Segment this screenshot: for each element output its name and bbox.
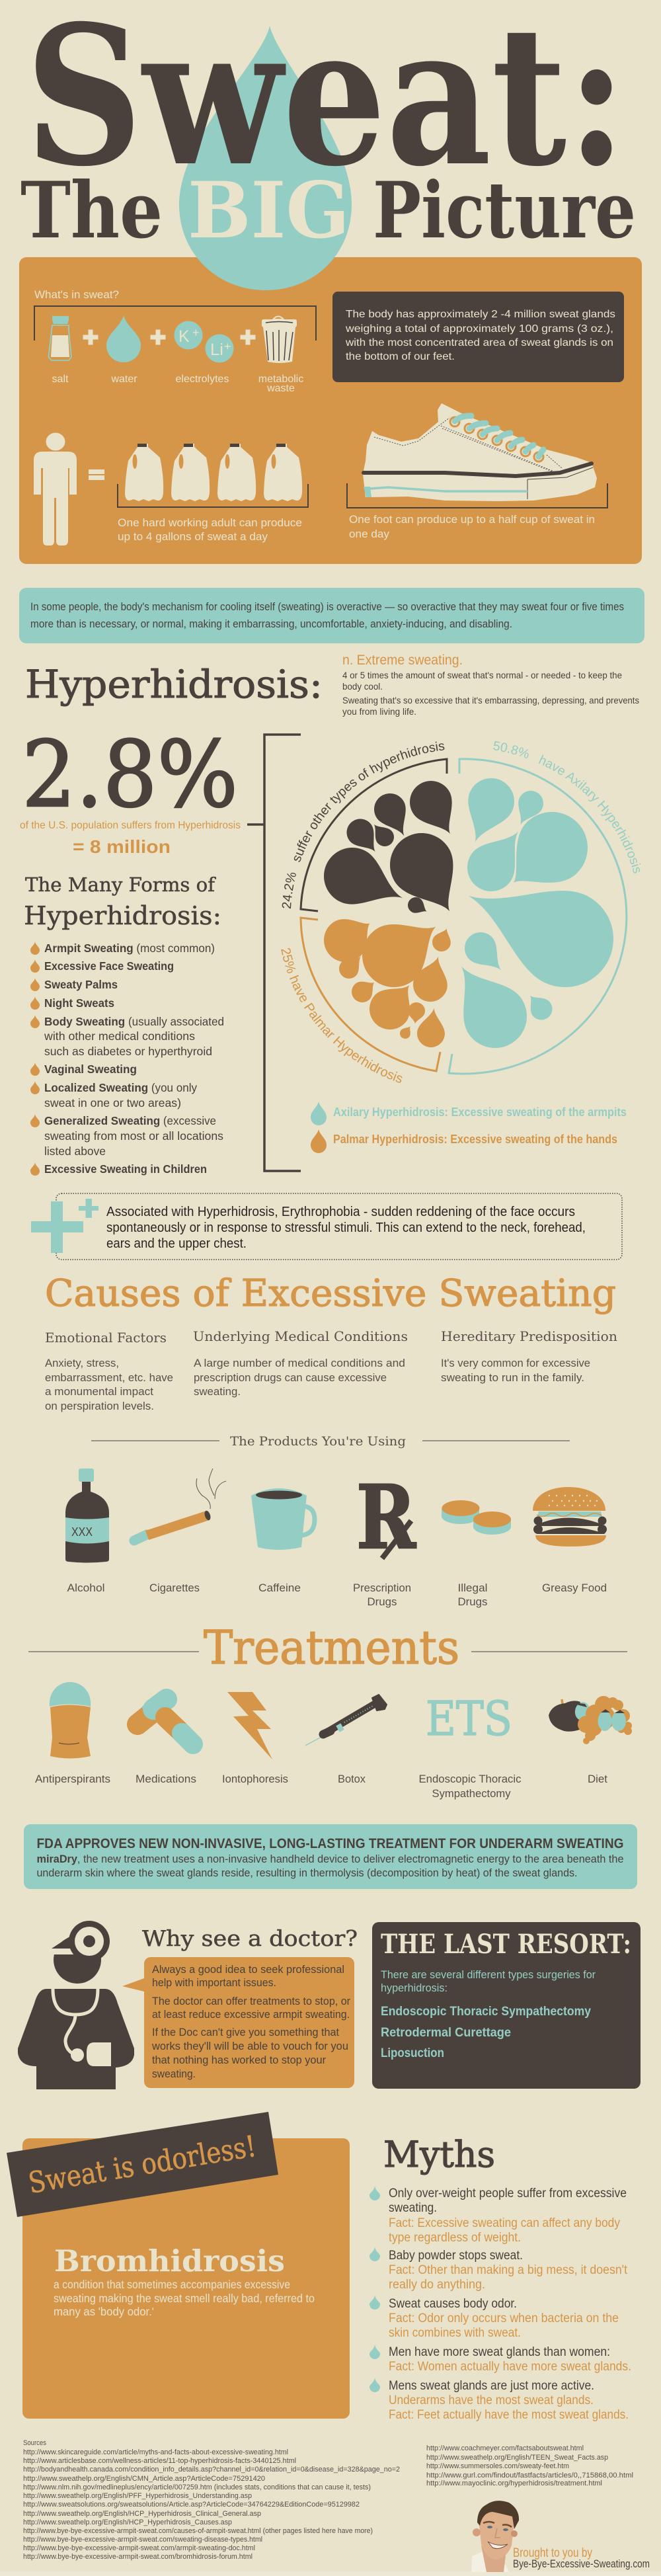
icon: medications xyxy=(137,1699,193,1744)
cause: emotional factors xyxy=(45,1330,173,1412)
product labels: Drugs xyxy=(457,1595,488,1608)
list: myths and facts: Baby powder stops sweat. xyxy=(389,2249,523,2263)
icon: alcohol: XXX xyxy=(71,1525,93,1539)
legend: Axilary Hyperhidrosis: Excessive sweating of the armpits xyxy=(333,1106,627,1119)
list: forms of hyperhidrosis: sweat in one or two areas) xyxy=(44,1096,181,1109)
statistic: 2.8%: 2.8% xyxy=(22,721,238,828)
callout: sweat glands: with the most concentrated area of sweat glands is on xyxy=(345,337,613,348)
list: myths and facts: skin combines with sweat. xyxy=(389,2326,521,2340)
bracket: shoe xyxy=(347,483,607,508)
list: myths and facts: type regardless of weight. xyxy=(389,2231,521,2245)
list: myths and facts: Fact: Women actually have more sweat glands. xyxy=(389,2360,631,2374)
ingredient labels: waste xyxy=(266,383,295,394)
text: gallons per day xyxy=(118,516,302,543)
ingredient labels: salt xyxy=(52,374,69,385)
list: forms of hyperhidrosis: with other medical conditions xyxy=(44,1029,195,1043)
icon: electrolytes: + xyxy=(192,326,200,339)
icon: plus xyxy=(241,329,255,345)
subheading: products: The Products You're Using xyxy=(230,1434,406,1449)
panel: the last resort: hyperhidrosis: xyxy=(381,1982,447,1994)
callout: sweat glands: weighing a total of approximately 100 grams (3 oz.), xyxy=(345,323,613,335)
panel: what's in sweat xyxy=(19,257,642,564)
heading: hyperhidrosis: Hyperhidrosis: xyxy=(25,662,323,707)
sources: left column xyxy=(23,2439,400,2561)
legend xyxy=(311,1102,627,1153)
product labels: Cigarettes xyxy=(149,1582,200,1594)
icon: water xyxy=(106,315,141,362)
sources: right column: http://www.summersoles.com/sweaty-feet.htm xyxy=(426,2462,569,2470)
icon: large title water drop xyxy=(179,26,352,290)
list: forms of hyperhidrosis: Night Sweats xyxy=(44,996,114,1010)
bracket: ingredients xyxy=(34,306,316,341)
text: gallons per day: up to 4 gallons of sweat a day xyxy=(118,530,268,543)
chart label: palmar: 25% have Palmar Hyperhidrosis xyxy=(281,948,403,1083)
panel: FDA approval: miraDry, the new treatment uses a non-invasive handheld device to deliver electromagnetic energy to the area beneath the xyxy=(37,1853,624,1865)
cause: medical conditions: sweating. xyxy=(194,1386,241,1398)
heading: many forms xyxy=(24,873,221,930)
sources: left column: http://www.sweathelp.org/English/PFF_Hyperhidrosis_Understanding.asp xyxy=(23,2492,252,2500)
chart: palmar drops xyxy=(315,901,455,1049)
ingredient labels: electrolytes xyxy=(176,374,229,385)
panel: overactive intro: more than is necessary, or normal, making it embarrassing, uncomfortable, anxiety-inducing, and disabling. xyxy=(30,618,512,630)
treatment labels xyxy=(35,1773,607,1800)
callout: doctor speech bubble: The doctor can offer treatments to stop, or xyxy=(152,1995,350,2007)
treatment labels: Antiperspirants xyxy=(35,1773,110,1785)
treatment labels: Iontophoresis xyxy=(222,1773,288,1785)
list: myths and facts: Sweat causes body odor. xyxy=(389,2297,517,2311)
cause: medical conditions xyxy=(193,1328,408,1398)
cause: hereditary xyxy=(441,1328,617,1384)
sources: left column: http://www.bye-bye-excessive-armpit-sweat.com/armpit-sweating-doc.html xyxy=(23,2544,255,2552)
list: myths and facts: really do anything. xyxy=(389,2278,485,2292)
text: half cup xyxy=(349,513,595,540)
icon: person xyxy=(34,432,77,545)
definition: 4 or 5 times the amount of sweat that's normal - or needed - to keep the xyxy=(342,670,622,680)
panel: bromhidrosis: many as 'body odor.' xyxy=(54,2305,154,2318)
heading: many forms: The Many Forms of xyxy=(25,873,216,896)
product labels: Alcohol xyxy=(67,1582,104,1594)
icon: caffeine xyxy=(251,1488,315,1550)
text: half cup: One foot can produce up to a half cup of sweat in xyxy=(349,513,595,526)
cause: medical conditions: A large number of medical conditions and xyxy=(194,1357,405,1369)
callout: doctor speech bubble: If the Doc can't give you something that xyxy=(152,2026,339,2038)
icon: antiperspirant xyxy=(50,1682,91,1759)
icon: cigarette xyxy=(134,1469,226,1541)
callout: erythrophobia: Associated with Hyperhidrosis, Erythrophobia - sudden reddening of the face occurs xyxy=(106,1205,575,1219)
product labels xyxy=(67,1582,607,1608)
product labels: Greasy Food xyxy=(542,1582,607,1594)
icon: syringe xyxy=(305,1695,387,1746)
definition xyxy=(342,653,639,717)
panel: bromhidrosis: a condition that sometimes accompanies excessive xyxy=(54,2278,290,2291)
heading: causes: Causes of Excessive Sweating xyxy=(45,1272,616,1315)
callout: doctor speech bubble: at least reduce excessive armpit sweating. xyxy=(152,2008,350,2021)
chart: other types drops xyxy=(315,773,477,928)
cause: emotional factors: a monumental impact xyxy=(45,1386,153,1398)
callout: erythrophobia: ears and the upper chest. xyxy=(106,1236,247,1251)
icon: electrolytes xyxy=(175,321,234,362)
treatment labels: Sympathectomy xyxy=(432,1787,511,1800)
panel: bromhidrosis xyxy=(22,2138,350,2419)
icon: plus xyxy=(83,329,98,345)
callout: erythrophobia: spontaneously or in response to stressful stimuli. This can extend to the neck, forehead, xyxy=(106,1221,586,1235)
list: myths and facts xyxy=(369,2186,631,2422)
sources: left column: Sources xyxy=(23,2439,46,2447)
bracket: statistics xyxy=(247,735,301,1171)
cause: emotional factors: Emotional Factors xyxy=(45,1330,167,1346)
chart: axillary drops xyxy=(435,772,629,1061)
heading: myths: Myths xyxy=(383,2134,495,2175)
icon: electrolytes: K xyxy=(178,327,190,346)
cause: medical conditions: prescription drugs can cause excessive xyxy=(194,1372,387,1384)
sources: right column: http://www.gurl.com/findout/fastfacts/articles/0,,715868,00.html xyxy=(426,2472,633,2479)
sources: left column: http://www.sweatsolutions.org/sweatsolutions/Article.asp?ArticleCode=34764229&EditionCode=95129982 xyxy=(23,2501,360,2509)
cause: emotional factors: Anxiety, stress, xyxy=(45,1357,119,1369)
list: myths and facts: Fact: Excessive sweating can affect any body xyxy=(389,2216,620,2230)
panel: the last resort: Liposuction xyxy=(381,2046,444,2060)
list: myths and facts: Fact: Odor only occurs when bacteria on the xyxy=(389,2312,619,2325)
callout: doctor speech bubble: help with important issues. xyxy=(152,1976,276,1989)
icon: electrolytes: + xyxy=(224,340,231,353)
list: myths and facts: Men have more sweat glands than women: xyxy=(389,2345,610,2359)
panel: FDA approval: underarm skin where the sweat glands reside, resulting in thermolysis (decomposition by heat) of the sweat glands. xyxy=(37,1867,578,1879)
callout: sweat glands: the bottom of our feet. xyxy=(346,351,455,362)
list: forms of hyperhidrosis: listed above xyxy=(44,1145,106,1158)
panel: the last resort: Endoscopic Thoracic Sympathectomy xyxy=(381,2005,591,2019)
ingredient labels: water xyxy=(110,374,137,385)
statistic: 2.8%: of the U.S. population suffers from Hyperhidrosis xyxy=(20,820,241,831)
credit xyxy=(513,2546,650,2570)
icon: diet xyxy=(549,1696,632,1744)
icon: ETS: ETS xyxy=(426,1691,512,1746)
chart: arcs xyxy=(301,759,627,1074)
list: forms of hyperhidrosis: Excessive Sweating in Children xyxy=(44,1162,207,1176)
callout: sweat glands: The body has approximately 2 -4 million sweat glands xyxy=(346,309,615,320)
treatment labels: Endoscopic Thoracic xyxy=(419,1773,522,1785)
cause: emotional factors: embarrassment, etc. have xyxy=(45,1372,173,1384)
definition: n. Extreme sweating. xyxy=(342,653,463,668)
sources: left column: http://www.bye-bye-excessive-armpit-sweat.com/causes-of-armpit-sweat.html (other pages listed here have more) xyxy=(23,2527,373,2535)
heading: what's in sweat: What's in sweat? xyxy=(34,288,119,301)
credit: Brought to you by xyxy=(513,2546,592,2560)
panel: bromhidrosis: Bromhidrosis xyxy=(54,2243,285,2278)
panel: the last resort: Retrodermal Curettage xyxy=(381,2026,511,2040)
cause: hereditary: It's very common for excessive xyxy=(441,1357,590,1369)
panel: the last resort: There are several different types surgeries for xyxy=(381,1968,596,1981)
panel: the last resort xyxy=(372,1922,641,2089)
banner: sweat is odorless: Sweat is odorless! xyxy=(26,2130,258,2200)
chart label: other types: 24.2% suffer other types of hyperhidrosis xyxy=(282,742,444,908)
panel: bromhidrosis: sweating making the sweat smell really bad, referred to xyxy=(54,2292,315,2305)
product labels: Prescription xyxy=(353,1582,411,1594)
heading: treatments: Treatments xyxy=(204,1621,459,1675)
list: forms of hyperhidrosis: Localized Sweating (you only xyxy=(44,1081,197,1094)
list: forms of hyperhidrosis: Armpit Sweating (most common) xyxy=(44,942,215,955)
icon: alcohol xyxy=(65,1469,109,1563)
icon: plus xyxy=(151,329,165,345)
sources: left column: http://www.bye-bye-excessive-armpit-sweat.com/sweating-disease-types.html xyxy=(23,2536,262,2544)
list: forms of hyperhidrosis: Excessive Face Sweating xyxy=(44,959,174,973)
callout: doctor speech bubble: that nothing has worked to stop your xyxy=(152,2054,326,2066)
icon: doctor xyxy=(18,1921,134,2089)
list: forms of hyperhidrosis: Generalized Sweating (excessive xyxy=(44,1114,216,1127)
treatment labels: Botox xyxy=(338,1773,366,1785)
sources: left column: http://www.nlm.nih.gov/medlineplus/ency/article/007259.htm (includes stats, conditions that can cause it, tests) xyxy=(23,2483,371,2491)
callout: erythrophobia xyxy=(31,1193,622,1260)
product labels: Drugs xyxy=(368,1595,397,1608)
text: half cup: one day xyxy=(349,528,390,540)
cause: medical conditions: Underlying Medical Conditions xyxy=(193,1328,408,1344)
icon: shoe xyxy=(363,403,597,501)
product labels: Caffeine xyxy=(258,1582,301,1594)
heading: many forms: Hyperhidrosis: xyxy=(24,901,221,930)
list: myths and facts: Fact: Other than making a big mess, it doesn't xyxy=(389,2263,628,2277)
panel: FDA approval xyxy=(24,1824,637,1889)
list: myths and facts: sweating. xyxy=(389,2201,437,2215)
list: forms of hyperhidrosis: Vaginal Sweating xyxy=(44,1063,137,1076)
list: forms of hyperhidrosis: Sweaty Palms xyxy=(44,978,118,991)
icon: illegal drugs xyxy=(442,1500,511,1535)
icon: lightning bolt xyxy=(227,1692,272,1759)
callout: sweat glands xyxy=(332,292,624,382)
sources: left column: http://www.sweathelp.org/English/HCP_Hyperhidrosis_Clinical_General.asp xyxy=(23,2510,261,2518)
sources: right column: http://www.sweathelp.org/English/TEEN_Sweat_Facts.asp xyxy=(426,2454,608,2462)
definition: Sweating that's so excessive that it's embarrassing, depressing, and prevents xyxy=(342,695,639,705)
icon: prescription: R xyxy=(356,1467,416,1569)
callout: doctor speech bubble: Always a good idea to seek professional xyxy=(152,1963,344,1976)
callout: doctor speech bubble xyxy=(122,1957,354,2088)
bracket: gallons xyxy=(118,484,308,507)
list: myths and facts: Only over-weight people suffer from excessive xyxy=(389,2187,627,2200)
list: myths and facts: Mens sweat glands are just more active. xyxy=(389,2379,594,2393)
sources: left column: http://www.articlesbase.com/wellness-articles/11-top-hyperhidrosis-facts-3440125.html xyxy=(23,2457,296,2465)
list: forms of hyperhidrosis xyxy=(30,942,224,1176)
icon: electrolytes: Li xyxy=(210,341,223,359)
sources: left column: http://www.sweathelp.org/English/HCP_Hyperhidrosis_Causes.asp xyxy=(23,2518,232,2526)
sources: left column: http://www.skincareguide.com/article/myths-and-facts-about-excessive-sweating.html xyxy=(23,2448,288,2456)
treatment labels: Diet xyxy=(588,1773,607,1785)
panel: overactive intro xyxy=(19,588,644,643)
sources: left column: http://bodyandhealth.canada.com/condition_info_details.asp?channel_id=0&relation_id=0&disease_id=328&page_no=2 xyxy=(23,2466,400,2474)
icon: burger xyxy=(533,1487,607,1547)
list: myths and facts: Fact: Feet actually have the most sweat glands. xyxy=(389,2408,629,2422)
banner: sweat is odorless xyxy=(7,2112,278,2217)
heading: why see a doctor: Why see a doctor? xyxy=(142,1925,358,1951)
sources: left column: http://www.bye-bye-excessive-armpit-sweat.com/bromhidrosis-forum.html xyxy=(23,2553,253,2561)
callout: doctor speech bubble: works they'll will be able to vouch for you xyxy=(151,2040,348,2052)
list: forms of hyperhidrosis: sweating from most or all locations xyxy=(44,1129,223,1143)
sources: right column xyxy=(426,2444,633,2487)
cause: hereditary: sweating to run in the family. xyxy=(441,1372,584,1384)
title: BIG xyxy=(188,165,350,256)
cause: emotional factors: on perspiration levels. xyxy=(45,1400,154,1412)
icon: trash can xyxy=(262,316,297,363)
text: gallons per day: One hard working adult can produce xyxy=(118,516,302,529)
ingredient labels: metabolic xyxy=(258,374,303,385)
definition: body cool. xyxy=(342,681,383,692)
legend: Palmar Hyperhidrosis: Excessive sweating of the hands xyxy=(333,1133,617,1146)
photo: portrait xyxy=(471,2501,519,2572)
ingredient labels xyxy=(52,374,303,394)
list: forms of hyperhidrosis: such as diabetes or hyperthyroid xyxy=(44,1045,212,1058)
icon: salt xyxy=(49,316,71,360)
title: The xyxy=(20,165,163,256)
icon: four gallon jugs xyxy=(125,444,302,501)
treatment labels: Medications xyxy=(136,1773,196,1785)
product labels: Illegal xyxy=(457,1582,488,1594)
list: forms of hyperhidrosis: Body Sweating (usually associated xyxy=(44,1015,224,1028)
chart label: axillary: 50.8% have Axilary Hyperhidrosis xyxy=(493,741,641,873)
callout: doctor speech bubble: sweating. xyxy=(152,2068,196,2080)
icon: equals xyxy=(89,469,104,480)
cause: hereditary: Hereditary Predisposition xyxy=(441,1328,617,1344)
statistic: 2.8%: = 8 million xyxy=(73,836,171,857)
sources: left column: http://www.sweathelp.org/English/CMN_Article.asp?ArticleCode=75291420 xyxy=(23,2475,265,2483)
sources: right column: http://www.mayoclinic.org/hyperhidrosis/treatment.html xyxy=(426,2479,602,2487)
definition: you from living life. xyxy=(342,706,416,717)
list: myths and facts: Underarms have the most sweat glands. xyxy=(389,2394,594,2407)
sources: right column: http://www.coachmeyer.com/factsaboutsweat.html xyxy=(426,2444,584,2452)
